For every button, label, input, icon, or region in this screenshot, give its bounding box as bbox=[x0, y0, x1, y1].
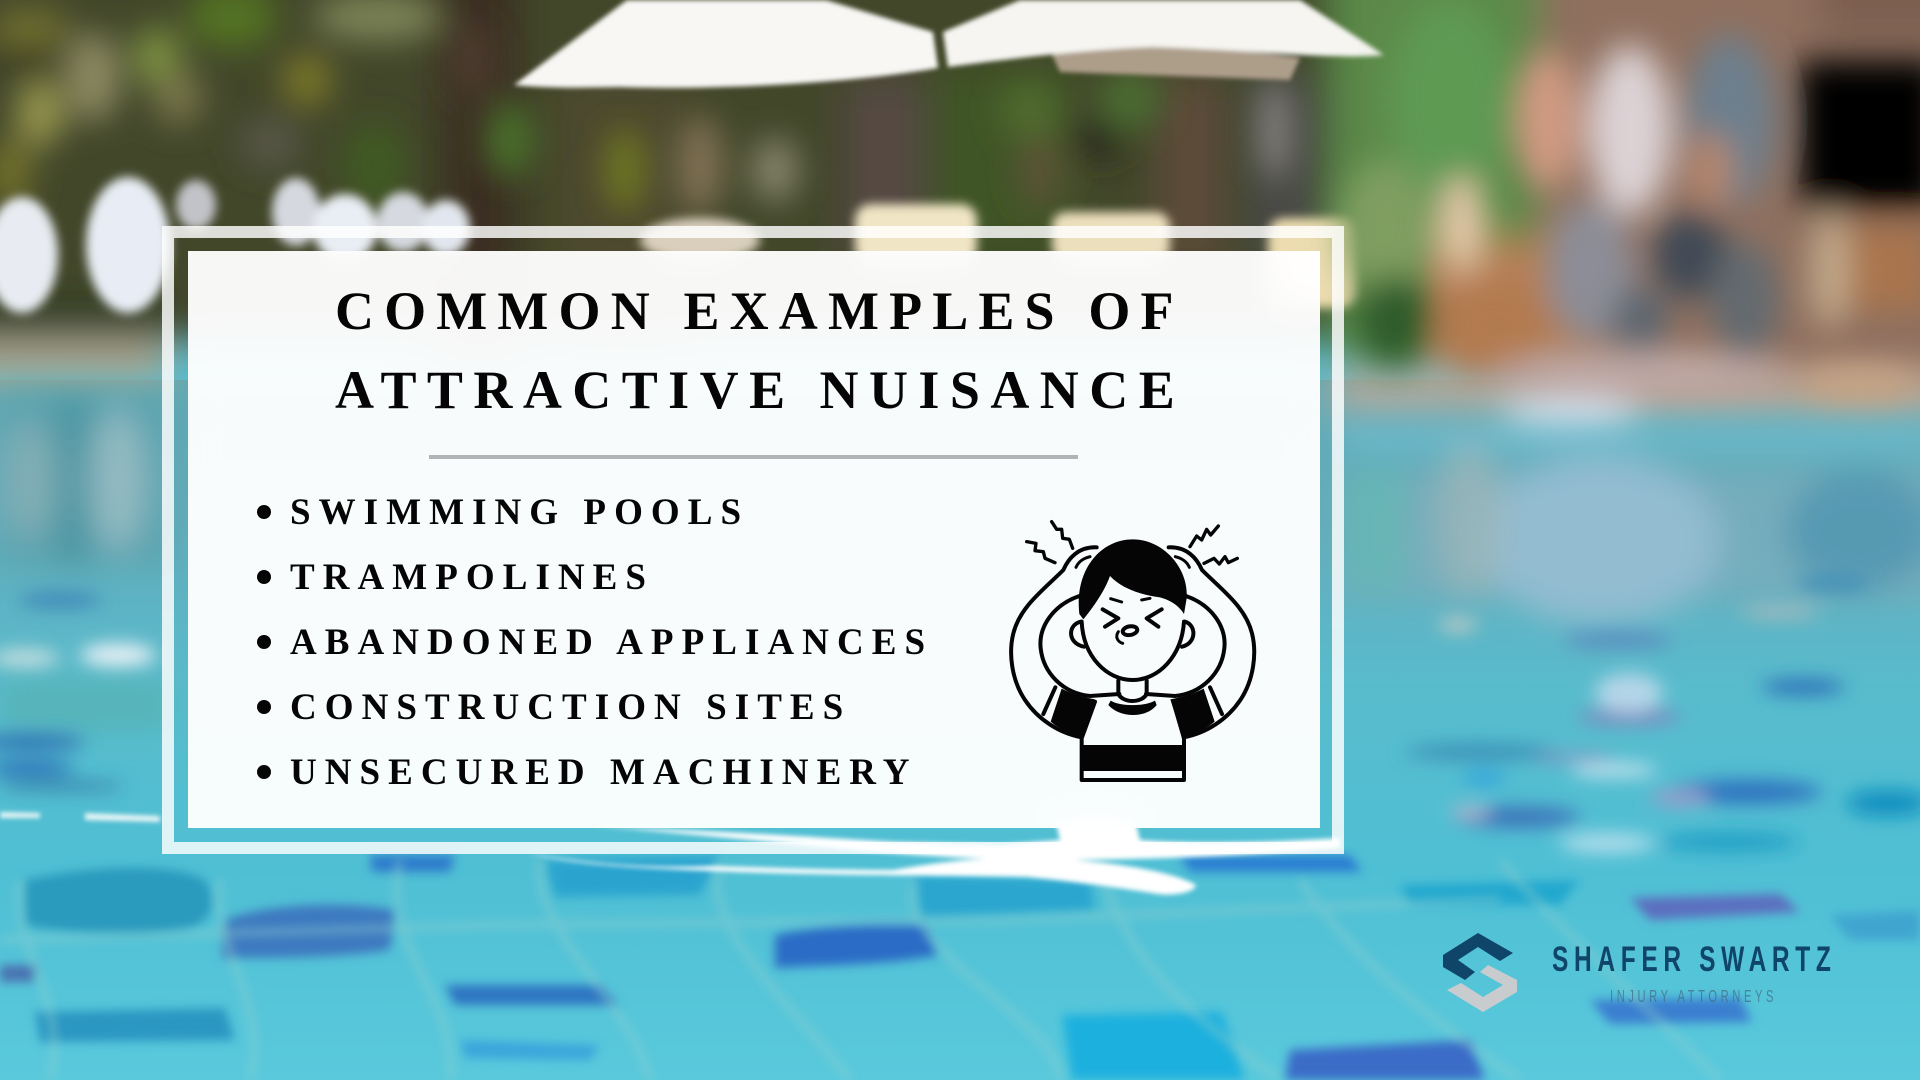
title: COMMON EXAMPLES OF bbox=[335, 281, 1184, 341]
frame: translucent white border bbox=[162, 226, 1344, 854]
logo wordmark: SHAFER SWARTZ bbox=[1552, 941, 1837, 979]
icon: hair bbox=[1079, 539, 1187, 619]
list: attractive nuisance examples bbox=[257, 492, 1239, 793]
divider under title bbox=[429, 455, 1078, 459]
umbrellas bbox=[514, 0, 1384, 88]
panel: white content card bbox=[188, 251, 1320, 828]
white highlights behind the panel edge bbox=[0, 177, 1358, 313]
list: attractive nuisance examples: UNSECURED MACHINERY bbox=[290, 752, 918, 793]
water ripples and tiles, upper band bbox=[0, 575, 1920, 852]
water reflections bbox=[0, 395, 1920, 730]
logo tagline: INJURY ATTORNEYS bbox=[1610, 986, 1777, 1007]
soft scene masses bbox=[0, 0, 1920, 410]
pool floor tiles bbox=[0, 855, 1920, 1080]
list: attractive nuisance examples: CONSTRUCTION SITES bbox=[290, 687, 851, 728]
logo mark: grey lower half bbox=[1447, 965, 1517, 1012]
title: ATTRACTIVE NUISANCE bbox=[335, 360, 1185, 420]
icon: stressed person holding head bbox=[1009, 520, 1256, 782]
tree highlights, left bbox=[0, 0, 1291, 215]
garden and waterfall, right bbox=[1340, 0, 1920, 431]
list: attractive nuisance examples: TRAMPOLINES bbox=[290, 557, 654, 598]
list: attractive nuisance examples: ABANDONED APPLIANCES bbox=[290, 622, 933, 663]
logo: Shafer Swartz Injury Attorneys bbox=[1443, 933, 1837, 1012]
title bbox=[335, 281, 1185, 420]
white wave bbox=[0, 812, 1340, 895]
list: attractive nuisance examples: SWIMMING POOLS bbox=[290, 492, 749, 533]
grout lines bbox=[0, 860, 1720, 1080]
logo mark: dark upper half bbox=[1443, 933, 1513, 980]
